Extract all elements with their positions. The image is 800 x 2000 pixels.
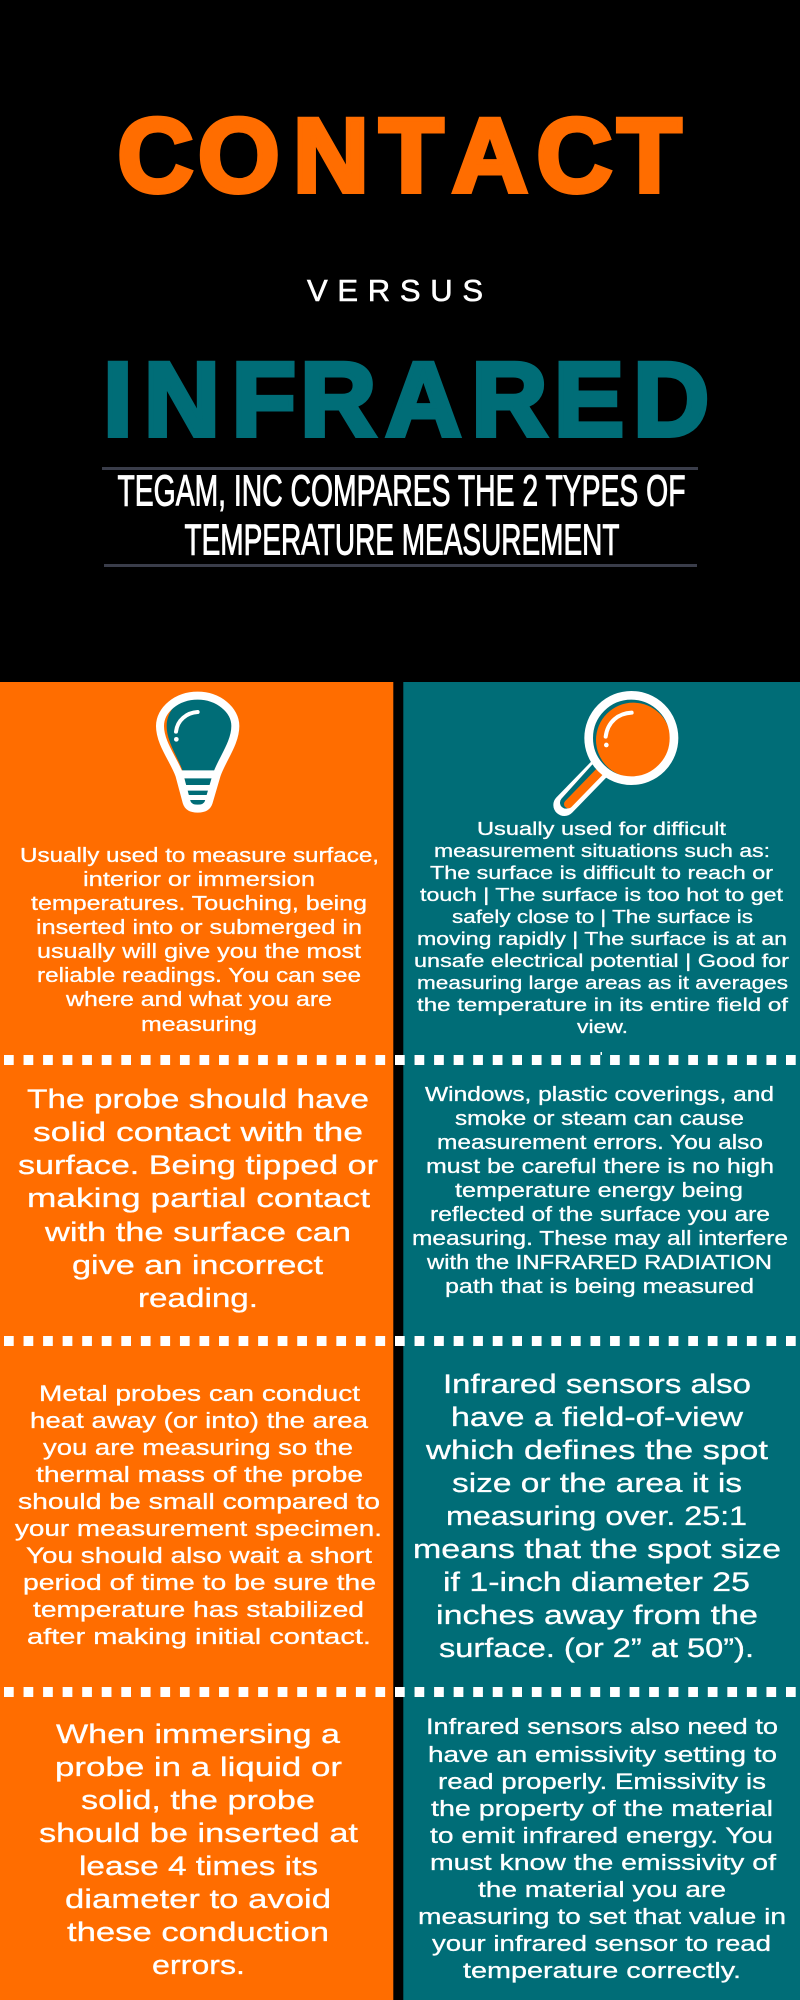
text: infrared row 2: reflected of the surface you are xyxy=(430,1204,770,1226)
text: contact row 3: heat away (or into) the area xyxy=(30,1408,369,1433)
text: infrared row 3: if 1-inch diameter 25 xyxy=(443,1567,750,1597)
text: infrared row 2: measurement errors. You also xyxy=(437,1132,763,1154)
text: contact row 1: interior or immersion xyxy=(83,869,315,891)
text: infrared row 4: to emit infrared energy. You xyxy=(430,1823,773,1848)
text: infrared row 4 xyxy=(418,1714,786,1983)
text: infrared row 3: surface. (or 2” at 50”). xyxy=(439,1633,754,1663)
text: contact row 2: reading. xyxy=(138,1283,258,1313)
text: contact row 1: reliable readings. You can see xyxy=(37,965,361,987)
panel: infrared column background xyxy=(403,682,800,2000)
text: infrared row 4: read properly. Emissivity is xyxy=(438,1769,766,1794)
text: infrared row 1: the temperature in its entire field of xyxy=(417,994,789,1015)
divider: row 1 dots xyxy=(4,1055,796,1065)
text: infrared row 3: Infrared sensors also xyxy=(443,1369,751,1399)
heading: VERSUS: VERSUS xyxy=(307,273,483,308)
icon: magnifying glass xyxy=(564,695,674,805)
text: contact row 4: diameter to avoid xyxy=(65,1884,331,1914)
text: infrared row 2: with the INFRARED RADIATION xyxy=(426,1252,772,1274)
text: contact row 3: you are measuring so the xyxy=(43,1435,353,1460)
text: contact row 3: temperature has stabilized xyxy=(33,1597,364,1622)
text: contact row 4: lease 4 times its xyxy=(79,1851,318,1881)
text: contact row 1: usually will give you the most xyxy=(37,941,362,963)
text: infrared row 2: smoke or steam can cause xyxy=(455,1108,744,1130)
text: infrared row 3: which defines the spot xyxy=(425,1435,769,1465)
text: contact row 1: where and what you are xyxy=(65,989,332,1011)
text: infrared row 3: means that the spot size xyxy=(413,1534,781,1564)
text: infrared row 1: The surface is difficult to reach or xyxy=(430,862,773,883)
text: infrared row 4: temperature correctly. xyxy=(463,1958,741,1983)
text: infrared row 3: inches away from the xyxy=(436,1600,758,1630)
text: infrared row 4: must know the emissivity of xyxy=(430,1850,777,1875)
text: contact row 1 xyxy=(20,845,379,1036)
text: contact row 1: measuring xyxy=(141,1014,257,1036)
divider: row 2 dots xyxy=(4,1336,796,1346)
text: infrared row 3: have a field-of-view xyxy=(451,1402,744,1432)
text: infrared row 3: measuring over. 25:1 xyxy=(446,1501,747,1531)
subtitle block with rules xyxy=(102,466,698,567)
text: infrared row 2: measuring. These may all interfere xyxy=(412,1228,788,1250)
text: contact row 2: give an incorrect xyxy=(72,1250,324,1280)
text: contact row 2: surface. Being tipped or xyxy=(18,1150,378,1180)
text: infrared row 4: your infrared sensor to read xyxy=(432,1931,771,1956)
text: contact row 3: your measurement specimen. xyxy=(15,1516,382,1541)
text: infrared row 2 xyxy=(412,1084,788,1298)
title: CONTACT: CONTACT xyxy=(118,98,681,214)
text: infrared row 1: measurement situations such as: xyxy=(434,840,770,861)
text: contact row 1: Usually used to measure surface, xyxy=(20,845,379,867)
text: infrared row 1: view. xyxy=(577,1016,628,1037)
text: infrared row 2: path that is being measured xyxy=(445,1276,754,1298)
text: infrared row 3: size or the area it is xyxy=(452,1468,742,1498)
panel: contact column background xyxy=(0,682,393,2000)
text: contact row 2: The probe should have xyxy=(27,1084,369,1114)
text: contact row 2 xyxy=(18,1084,378,1313)
text: contact row 3: Metal probes can conduct xyxy=(39,1381,361,1406)
text: infrared row 4: measuring to set that value in xyxy=(418,1904,786,1929)
text: contact row 3: after making initial contact. xyxy=(27,1624,371,1649)
text: contact row 3: period of time to be sure the xyxy=(23,1570,376,1595)
text: contact row 3 xyxy=(15,1381,382,1649)
text: infrared row 1 xyxy=(414,818,789,1037)
divider: row 3 dots xyxy=(4,1687,796,1697)
text: contact row 3: You should also wait a short xyxy=(26,1543,373,1568)
text: infrared row 4: Infrared sensors also need to xyxy=(426,1714,778,1739)
text: infrared row 1: touch | The surface is too hot to get xyxy=(420,884,783,905)
text: contact row 1: inserted into or submerged in xyxy=(36,917,362,939)
text: infrared row 3 xyxy=(413,1369,781,1663)
text: contact row 4: probe in a liquid or xyxy=(55,1752,342,1782)
text: infrared row 1: Usually used for difficult xyxy=(477,818,726,839)
icon: light bulb xyxy=(160,696,235,809)
text: contact row 2: solid contact with the xyxy=(33,1117,363,1147)
text: infrared row 1: unsafe electrical potential | Good for xyxy=(414,950,789,971)
text: infrared row 1: moving rapidly | The surface is at an xyxy=(417,928,787,949)
text: infrared row 2: Windows, plastic coverings, and xyxy=(425,1084,774,1106)
text: contact row 4: should be inserted at xyxy=(39,1818,359,1848)
text: contact row 4: errors. xyxy=(152,1950,245,1980)
title: INFRARED: INFRARED xyxy=(103,342,709,458)
text: contact row 3: thermal mass of the probe xyxy=(36,1462,363,1487)
text: infrared row 1: safely close to | The surface is xyxy=(452,906,753,927)
text: infrared row 4: the property of the material xyxy=(431,1796,773,1821)
text: infrared row 2: temperature energy being xyxy=(455,1180,743,1202)
text: infrared row 1: measuring large areas as it averages xyxy=(417,972,788,993)
text: contact row 4 xyxy=(39,1719,359,1980)
text: contact row 1: temperatures. Touching, being xyxy=(31,893,367,915)
text: infrared row 4: the material you are xyxy=(478,1877,726,1902)
text: contact row 4: When immersing a xyxy=(56,1719,341,1749)
text: contact row 2: making partial contact xyxy=(27,1183,371,1213)
text: infrared row 2: must be careful there is no high xyxy=(426,1156,774,1178)
text: contact row 3: should be small compared to xyxy=(18,1489,380,1514)
text: contact row 2: with the surface can xyxy=(44,1217,351,1247)
text: contact row 4: these conduction xyxy=(67,1917,329,1947)
text: contact row 4: solid, the probe xyxy=(81,1785,315,1815)
text: infrared row 4: have an emissivity setting to xyxy=(428,1742,777,1767)
